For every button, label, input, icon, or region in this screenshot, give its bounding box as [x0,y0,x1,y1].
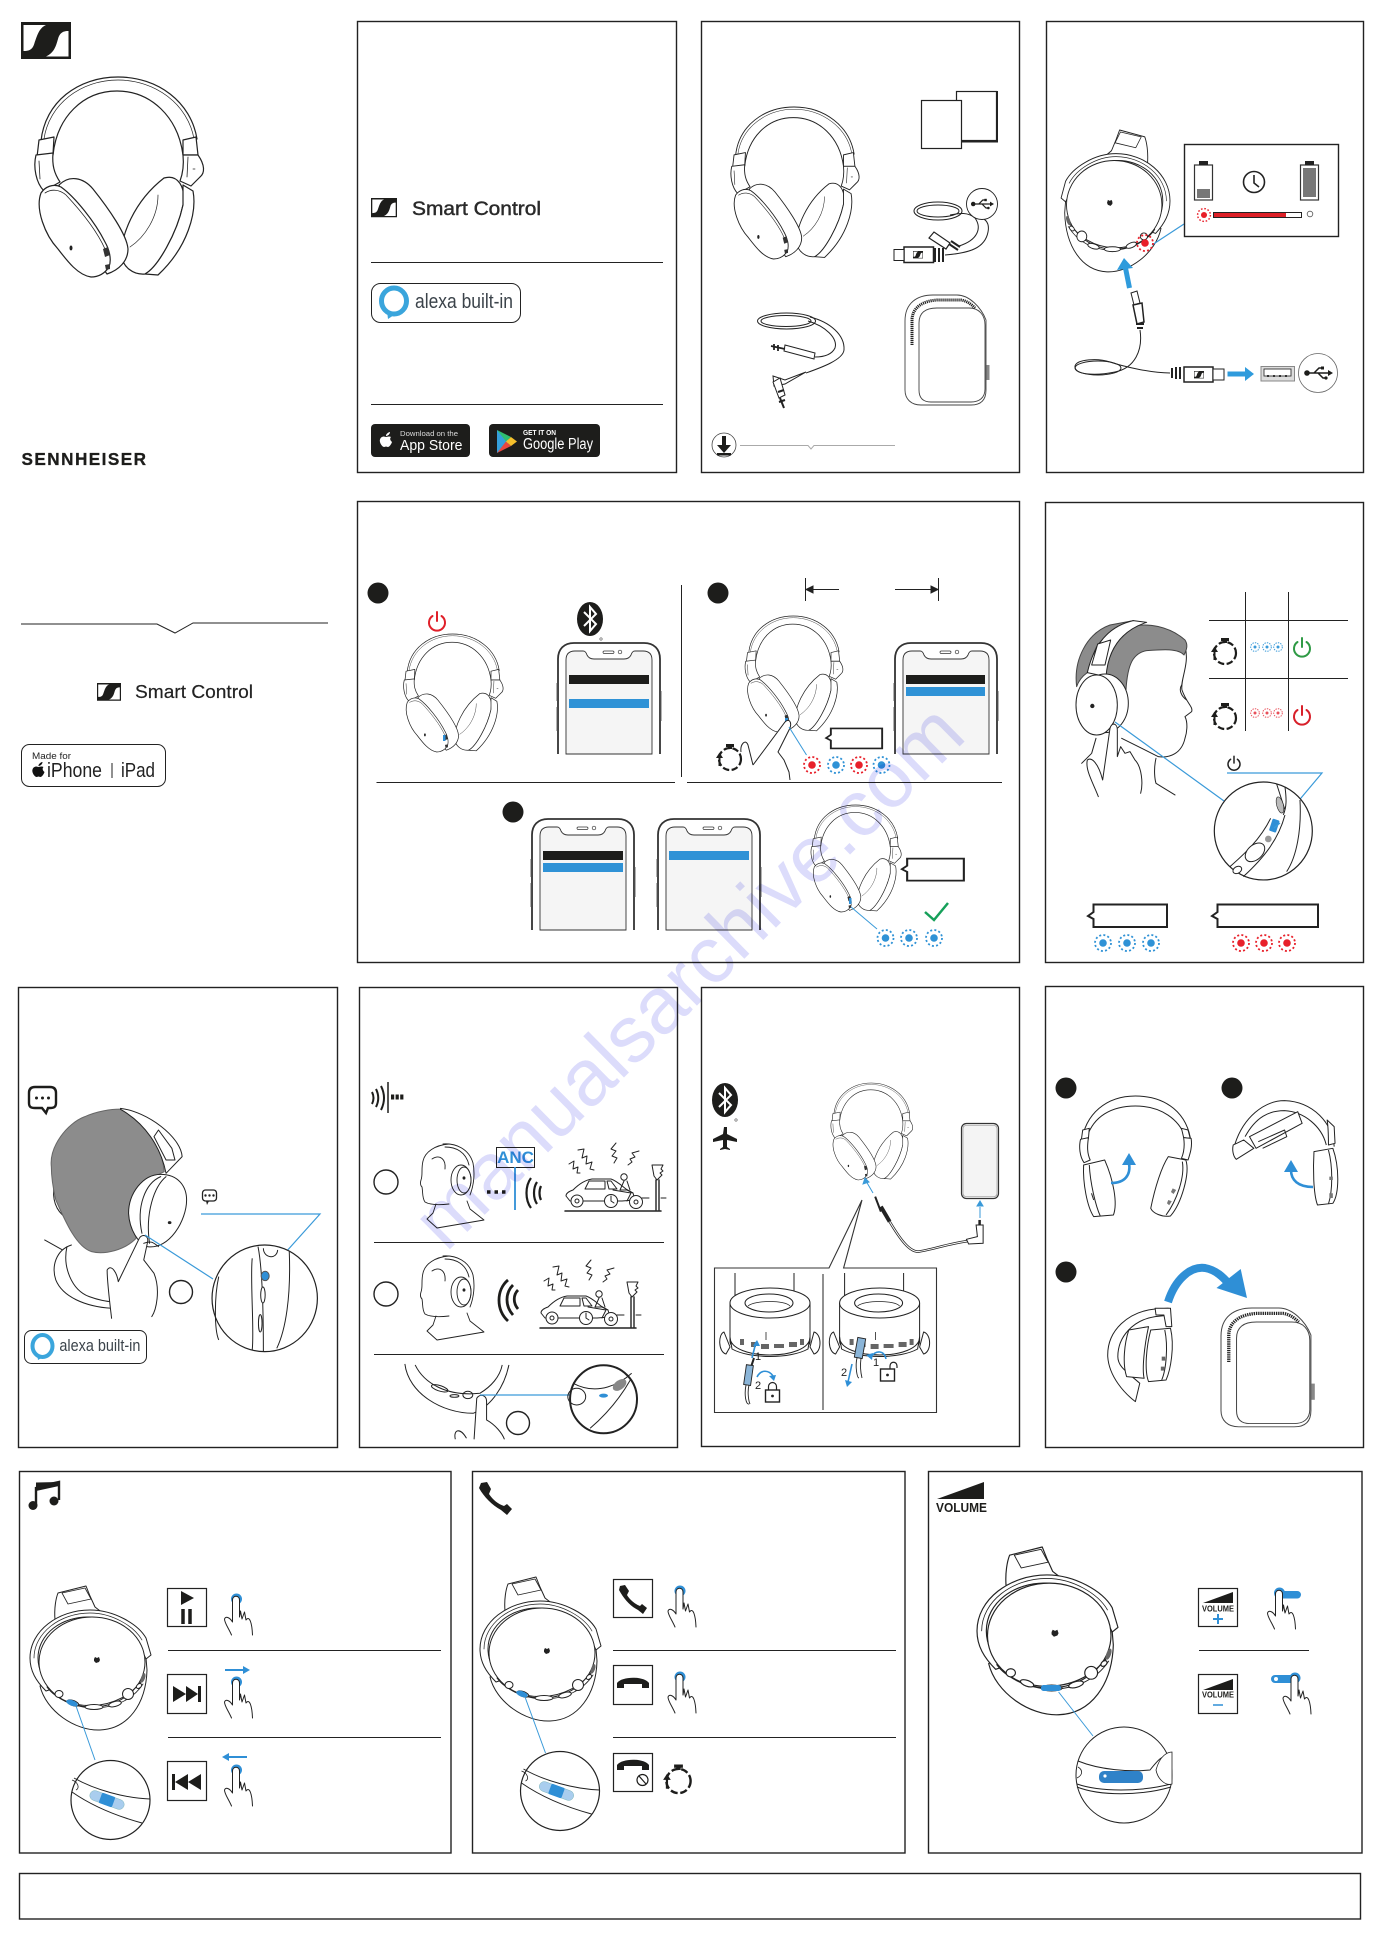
panel: folding and storage [1046,986,1364,1448]
ANC label [496,1148,534,1210]
bluetooth icon [577,602,603,640]
press and hold timer [716,744,741,770]
panel: volume controls [928,1472,1362,1853]
option circle a [374,1170,398,1194]
headphones cups rotated [1080,1096,1192,1217]
alexa built-in badge: alexa built-in [415,291,513,313]
green checkmark [925,903,948,920]
traffic noise scene [565,1143,666,1211]
traffic noise scene [540,1260,641,1328]
made for iPhone iPad badge [22,744,166,786]
folded headphones [1108,1308,1172,1402]
earcup illustration [480,1577,601,1721]
lock cable view [720,1273,820,1404]
magnified power button [1214,782,1312,880]
play pause key [168,1588,206,1626]
watermark: manualsarchive.com [395,687,980,1265]
headphones illustration [35,77,204,277]
earcup illustration [977,1547,1118,1715]
step 1 badge [1056,1078,1076,1098]
icon: volume: VOLUME [936,1501,987,1515]
volume down key [1198,1674,1238,1714]
unlock cable view [829,1273,930,1387]
phone step 3b [657,819,761,930]
alexa built-in badge [372,284,520,322]
off callout [1212,904,1318,927]
loud sound waves [499,1280,518,1321]
documents [922,91,997,148]
google play button: GET IT ON [523,430,556,437]
swipe left arrow [222,1753,247,1761]
speech bubble icon [29,1087,56,1113]
usb charging cable [1075,291,1224,382]
phone step 3a [531,819,635,930]
phone step 1 [557,643,661,754]
download icon [712,433,736,457]
aux cable [758,313,844,408]
airplane icon [713,1127,737,1150]
unlock cable view: 1 [873,1357,879,1369]
made for iPhone iPad badge: iPhone [47,760,102,782]
tap hand [668,1586,696,1627]
step 3 badge [502,802,524,822]
magnified multi function button [212,1245,317,1352]
step 2 badge [1222,1078,1242,1098]
step 2 badge [708,582,728,604]
magnified touch slider [1076,1727,1172,1823]
smartphone [962,1124,998,1198]
big arrow into pouch [1168,1268,1247,1302]
headphones illustration [731,107,859,259]
cover panel [21,22,328,786]
tap hand [224,1594,252,1635]
smart control heading: Smart Control [412,198,541,220]
notched divider [21,623,328,633]
empty battery [1194,161,1212,200]
icon: music note [28,1482,59,1510]
step circle [170,1280,192,1304]
end call key [614,1666,652,1704]
audio cable [875,1197,983,1252]
arrow: plug in [1117,258,1133,288]
smart control app logo: Smart Control [135,682,253,702]
volume up key [1198,1588,1238,1626]
carry pouch [1221,1308,1315,1427]
connected LEDs [878,930,942,946]
icon: telephone [479,1482,512,1515]
power-on row [1211,638,1310,664]
usb symbol circle [1298,354,1338,392]
headphones step 1 [404,634,503,752]
carry pouch [905,295,990,405]
on callout [1088,904,1167,927]
callout lines [145,1214,320,1279]
panel: noise cancelling [360,988,678,1448]
rotate arrow 2 [1284,1160,1313,1187]
tap hand [668,1672,696,1713]
callout lines [1115,722,1322,823]
volume up key: VOLUME [1202,1604,1234,1614]
step 1 badge [368,582,388,604]
person wearing headphones [1076,621,1193,797]
red LEDs [1233,935,1295,951]
earcup illustration [1061,130,1170,272]
previous track key [168,1762,206,1800]
tap hand [224,1764,252,1806]
app store button [371,424,470,457]
google play button: Google Play [523,436,593,453]
magnified ANC switch [568,1365,637,1433]
headphones step 2 [745,616,843,732]
swipe right arrow [225,1666,250,1674]
alexa built-in badge [24,1330,146,1364]
head with ANC on [420,1144,484,1228]
brand logo [21,22,71,59]
google play button [489,424,600,457]
pressing hand [741,720,791,780]
arrow: to usb port [1228,367,1254,381]
panel: music controls [20,1472,451,1853]
head from behind with headphones [45,1108,187,1318]
power icon label [1228,756,1240,770]
panel: voice assistant [18,988,338,1448]
panel: bluetooth pairing [358,502,1020,962]
pairing LED sequence [804,757,890,773]
phone step 2 [894,643,998,754]
blue LEDs [1095,935,1159,951]
swipe up hand [1268,1588,1301,1629]
usb port [1261,366,1294,381]
answer call key [614,1580,652,1618]
made for iPhone iPad badge: iPad [121,760,155,782]
unlock cable view: 2 [841,1367,847,1379]
power-off row [1211,703,1310,729]
earcup illustration [30,1586,151,1730]
table grid [1209,592,1348,731]
full battery [1300,161,1318,200]
LED progress [1198,209,1313,221]
headphones one cup folded [1233,1101,1338,1205]
brand wordmark: SENNHEISER [22,449,148,469]
charging LED [1137,235,1153,251]
magnified touch slider [520,1752,600,1830]
panel: on and off [1046,502,1364,962]
volume down key: VOLUME [1202,1690,1234,1700]
option circle c [506,1412,530,1434]
app store button: App Store [400,437,462,454]
sound waves [526,1178,541,1208]
option circle b [374,1282,398,1306]
distance arrows [806,578,938,601]
double tap hand [224,1676,252,1718]
small speech icon [202,1190,216,1205]
panel: call controls [472,1472,905,1853]
voice prompt callout [826,728,882,748]
panel: wired mode [702,988,1020,1446]
bluetooth icon [712,1083,738,1121]
connection arrows [863,1178,983,1218]
panel: package contents [702,22,1020,472]
icon: volume [936,1482,987,1515]
made for iPhone iPad badge: Made for [32,751,71,761]
step 3 badge [1056,1262,1076,1282]
app store button: Download on the [400,429,458,438]
headphones step 3 [811,805,901,912]
rotate arrow 1 [1111,1153,1136,1183]
footer box [20,1874,1360,1919]
clock [1244,172,1264,192]
reject call key [614,1754,652,1792]
next track key [168,1674,206,1714]
ANC icon [372,1082,404,1113]
connected callout [902,859,964,881]
head with ANC off [420,1256,484,1340]
usb symbol [971,199,994,209]
alexa built-in badge: alexa built-in [59,1336,140,1355]
panel: app and alexa [358,22,676,472]
swipe down hand [1271,1672,1311,1714]
press and hold timer [663,1764,691,1793]
usb cable [894,188,998,262]
power on icon [429,612,445,631]
magnified touch slider [71,1760,150,1840]
panel: charging [1046,22,1364,472]
ANC label: ANC [497,1148,534,1167]
callout line [1152,224,1184,245]
lock cable view: 1 [755,1351,761,1363]
finger on ANC switch [405,1364,509,1439]
charging time inset [1184,144,1338,236]
lock cable view: 2 [755,1380,761,1392]
headphones illustration [831,1083,913,1180]
